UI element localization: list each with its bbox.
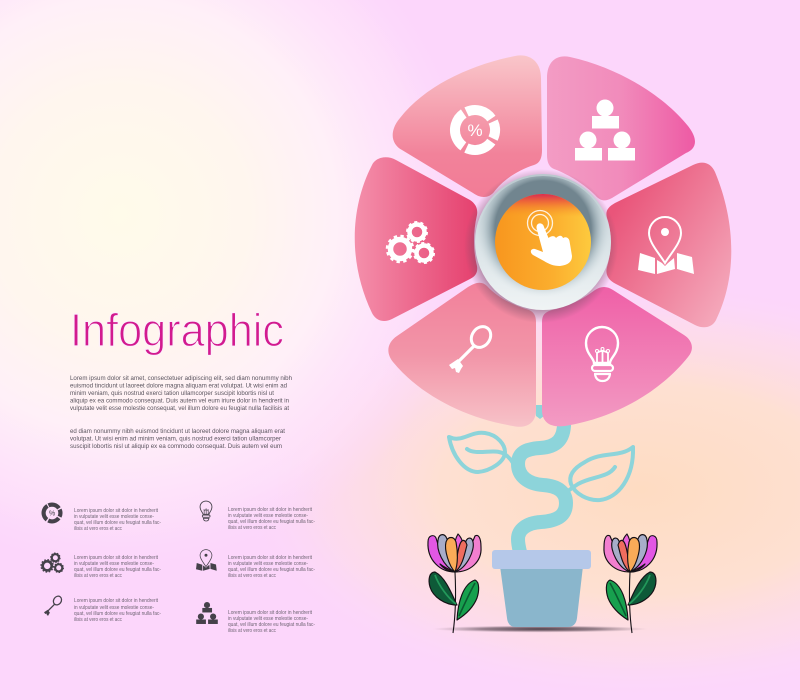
title: Infographic	[70, 304, 284, 356]
text block: intro paragraph: Lorem ipsum dolor sit amet, consectetuer adipiscing elit, sed diam nonummy nibh	[70, 375, 292, 382]
legend text: gears: ilisis at vero eros et acc	[74, 573, 122, 579]
legend icon: hierarchy	[196, 602, 218, 624]
text block: intro paragraph	[70, 375, 292, 412]
legend text: map: Lorem ipsum dolor sit dolor in hendrerit	[228, 555, 313, 561]
legend text: key	[74, 598, 161, 623]
text block: second paragraph	[70, 428, 285, 450]
icon: key	[449, 323, 495, 373]
petal: key	[388, 283, 536, 427]
legend text: percent: in vulputate velit esse molestie conse-	[74, 514, 154, 520]
legend text: map	[228, 555, 315, 579]
legend text: percent: ilisis at vero eros et acc	[74, 526, 122, 532]
legend text: gears: in vulputate velit esse molestie conse-	[74, 561, 154, 567]
right leaf	[568, 447, 633, 500]
legend text: key: quat, vel illum dolore eu feugiat nulla fac-	[74, 611, 161, 617]
petal: map	[606, 163, 731, 327]
legend text: bulb	[228, 507, 315, 531]
text block: second paragraph: volutpat. Ut wisi enim ad minim veniam, quis nostrud exerci tation ullamcorper	[70, 436, 282, 442]
legend text: bulb: ilisis at vero eros et acc	[228, 525, 276, 531]
legend text: gears: Lorem ipsum dolor sit dolor in hendrerit	[74, 555, 159, 561]
icon: hierarchy	[575, 100, 635, 160]
legend text: percent: quat, vel illum dolore eu feugiat nulla fac-	[74, 520, 161, 526]
petal: bulb	[542, 287, 692, 426]
text block: intro paragraph: minim veniam, quis nostrud exerci tation ullamcorper suscipit lobortis nisl ut	[70, 390, 274, 397]
stem	[518, 420, 566, 552]
legend icon: bulb	[200, 501, 212, 521]
legend text: map: quat, vel illum dolore eu feugiat nulla fac-	[228, 567, 315, 573]
legend text: key: ilisis at vero eros et acc	[74, 617, 122, 623]
left leaf	[449, 433, 513, 472]
petal: percent	[393, 55, 542, 197]
icon: percent donut	[448, 103, 502, 157]
legend text: bulb: in vulputate velit esse molestie conse-	[228, 513, 308, 519]
legend text: map: ilisis at vero eros et acc	[228, 573, 276, 579]
legend icon: key	[44, 595, 63, 616]
legend text: percent: Lorem ipsum dolor sit dolor in hendrerit	[74, 508, 159, 514]
legend text: key: in vulputate velit esse molestie conse-	[74, 605, 154, 611]
text block: second paragraph: suscipit lobortis nisl ut aliquip ex ea commodo consequat. Duis autem vel eum	[70, 443, 282, 450]
text block: intro paragraph: aliquip ex ea commodo consequat. Duis autem vel eum iriure dolor in hendrerit in	[70, 398, 289, 404]
text block: intro paragraph: vulputate velit esse molestie consequat, vel illum dolore eu feugiat nulla facilisis at	[70, 405, 289, 412]
icon: light bulb	[586, 327, 618, 381]
right small flower	[604, 534, 657, 633]
petal: hierarchy	[547, 56, 695, 200]
icon: gears	[387, 222, 434, 263]
legend text: hierarchy: ilisis at vero eros et acc	[228, 628, 276, 634]
legend icon: gears	[41, 553, 64, 573]
legend text: map: in vulputate velit esse molestie conse-	[228, 561, 308, 567]
pot	[492, 550, 591, 627]
legend text: bulb: quat, vel illum dolore eu feugiat nulla fac-	[228, 519, 315, 525]
legend icon: percent	[41, 502, 63, 524]
legend icon: map	[196, 550, 217, 571]
legend text: gears	[74, 555, 161, 579]
legend text: percent	[74, 508, 161, 532]
pot shadow	[432, 626, 648, 632]
legend text: hierarchy	[228, 610, 315, 634]
legend text: hierarchy: quat, vel illum dolore eu feugiat nulla fac-	[228, 622, 315, 628]
legend text: hierarchy: Lorem ipsum dolor sit dolor in hendrerit	[228, 610, 313, 616]
stem wedge between petals	[535, 405, 544, 419]
flower petals	[355, 55, 731, 427]
text block: intro paragraph: euismod tincidunt ut laoreet dolore magna aliquam erat volutpat. Ut wisi enim ad	[70, 382, 287, 390]
legend text: key: Lorem ipsum dolor sit dolor in hendrerit	[74, 598, 159, 604]
petal: gears	[355, 157, 477, 321]
plant stem and leaves	[449, 405, 633, 552]
icon: map pin	[638, 217, 694, 274]
legend text: gears: quat, vel illum dolore eu feugiat nulla fac-	[74, 567, 161, 573]
legend text: hierarchy: in vulputate velit esse molestie conse-	[228, 616, 308, 622]
icon: tapping hand	[528, 210, 572, 266]
center button	[464, 169, 618, 323]
text block: second paragraph: ed diam nonummy nibh euismod tincidunt ut laoreet dolore magna aliquam erat	[70, 428, 285, 435]
left small flower	[428, 534, 481, 633]
legend text: bulb: Lorem ipsum dolor sit dolor in hendrerit	[228, 507, 313, 513]
